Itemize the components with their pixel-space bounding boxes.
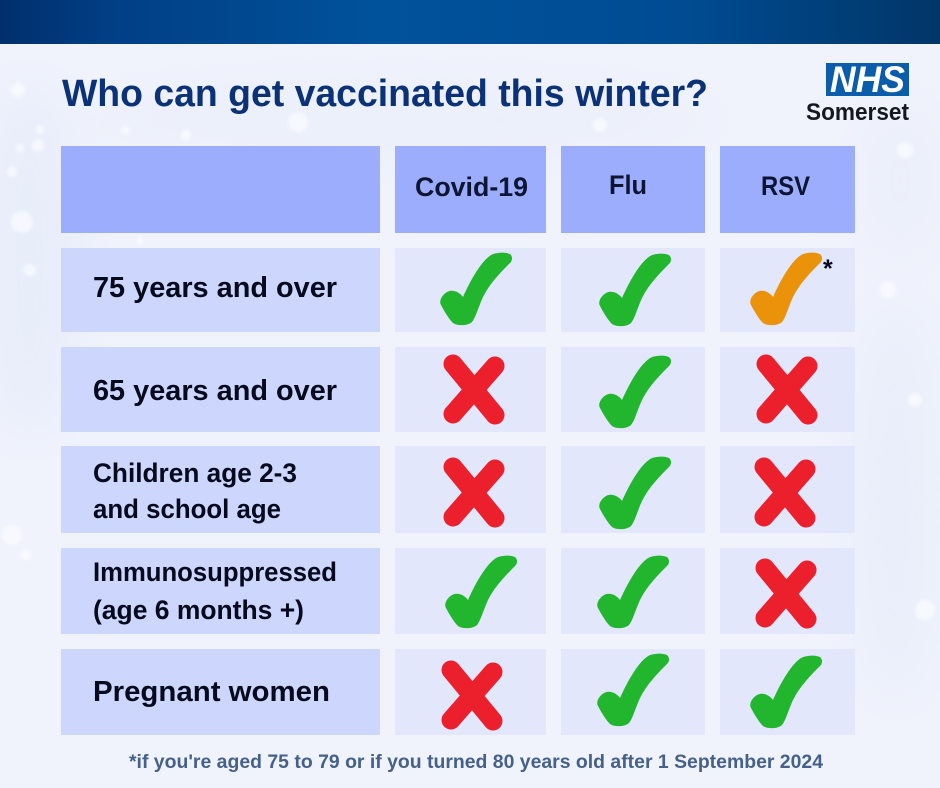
- row label: 65 years and over: [93, 375, 337, 407]
- NHS Somerset logo: NHS: [830, 59, 905, 100]
- footnote: *if you're aged 75 to 79 or if you turned 80 years old after 1 September 2024: [129, 752, 823, 773]
- row label: (age 6 months +): [93, 595, 304, 625]
- icon: red cross, Covid-19: [453, 467, 495, 518]
- icon: green tick, RSV: [750, 656, 822, 728]
- top banner bar: [0, 0, 940, 44]
- icon: orange tick, RSV: [750, 253, 822, 325]
- icon: green tick, Flu: [599, 356, 671, 428]
- asterisk note marker: *: [823, 255, 833, 283]
- column header: Flu: [561, 146, 705, 233]
- icon: green tick, Flu: [597, 556, 669, 628]
- table header row: [61, 146, 855, 233]
- icon: red cross, Covid-19: [453, 364, 495, 415]
- icon: red cross, RSV: [766, 364, 808, 415]
- icon: green tick, Flu: [599, 254, 671, 326]
- row: 65 years and over: [61, 347, 855, 432]
- NHS Somerset logo: [806, 59, 909, 126]
- row: 75 years and over: [61, 248, 855, 332]
- icon: green tick, Flu: [597, 654, 669, 726]
- column header: RSV: [720, 146, 855, 233]
- row label: 75 years and over: [93, 272, 337, 304]
- row label: Pregnant women: [93, 676, 330, 708]
- icon: green tick, Covid-19: [440, 253, 512, 325]
- column header: Covid-19: [395, 146, 546, 233]
- row: children age 2-3 and school age: [61, 446, 855, 533]
- row label: [93, 557, 337, 625]
- column header: Flu: Flu: [609, 170, 647, 200]
- icon: green tick, Flu: [599, 457, 671, 529]
- column header: Covid-19: Covid-19: [415, 172, 528, 202]
- row label: Children age 2-3: [93, 458, 297, 488]
- NHS Somerset logo: Somerset: [806, 99, 909, 126]
- row label: and school age: [93, 494, 281, 524]
- icon: red cross, RSV: [764, 467, 806, 518]
- icon: red cross, RSV: [765, 568, 807, 619]
- column header: RSV: RSV: [761, 171, 810, 201]
- row: immunosuppressed: [61, 548, 855, 634]
- row label: Immunosuppressed: [93, 557, 337, 587]
- icon: green tick, Covid-19: [445, 556, 517, 628]
- row: pregnant women: [61, 649, 855, 735]
- row label: [93, 458, 297, 524]
- title: Who can get vaccinated this winter?: [62, 73, 708, 115]
- icon: red cross, Covid-19: [451, 670, 493, 721]
